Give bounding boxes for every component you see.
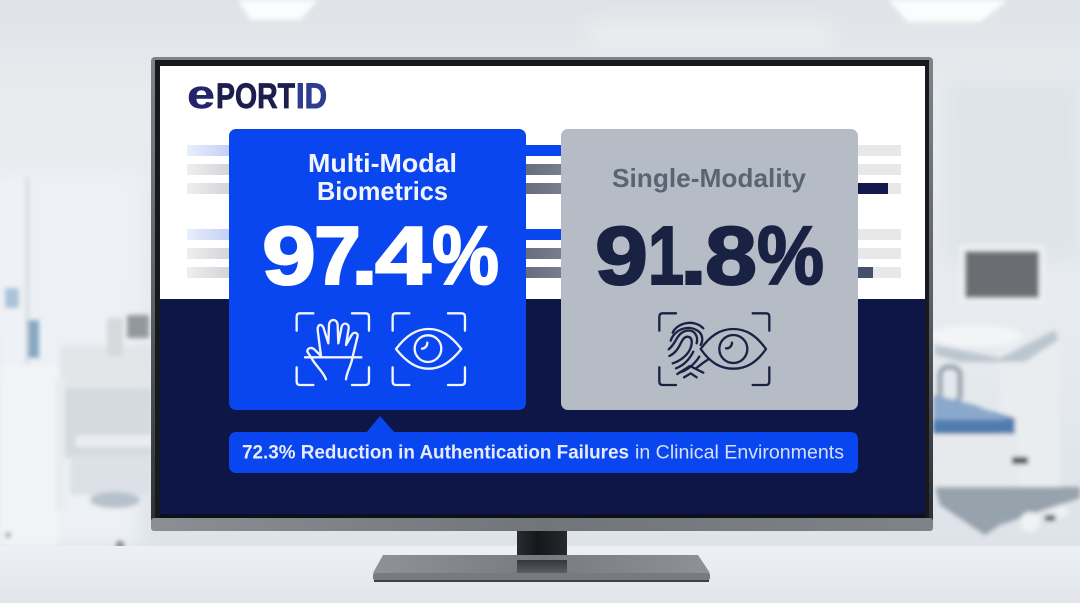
screen: white upper area <box>160 66 925 299</box>
logo: PORT <box>216 77 295 116</box>
logo: ID <box>296 77 327 116</box>
stat: 91.8%: 9 <box>595 209 648 302</box>
right ultrasound machine and bed <box>927 245 1080 535</box>
logo <box>187 73 327 117</box>
stand neck <box>517 530 567 560</box>
monitor <box>151 57 933 531</box>
heading: multi-modal biometrics: Biometrics <box>317 176 448 206</box>
stat: 91.8%: 8 <box>705 209 757 302</box>
heading: multi-modal biometrics <box>308 148 457 206</box>
desk surface <box>0 546 1080 603</box>
heading: multi-modal biometrics: Multi-Modal <box>308 148 457 178</box>
screen: navy lower area <box>160 299 925 514</box>
icon: fingerprint and eye scan <box>659 313 769 385</box>
stand base <box>373 555 710 582</box>
icon: hand scan <box>297 313 369 385</box>
stat: 97.4%: % <box>432 209 499 302</box>
stat: 91.8%: % <box>757 209 824 302</box>
stat: 97.4%: 4 <box>375 209 431 302</box>
monitor stand <box>373 530 710 582</box>
callout: reduction in authentication failures <box>229 416 858 473</box>
stat: 91.8%: 1 <box>648 209 684 302</box>
panel: single-modality <box>561 129 858 410</box>
background data bars <box>187 145 901 278</box>
ceiling lights <box>238 0 1008 22</box>
stat: 97.4%: . <box>351 209 378 302</box>
panel: multi-modal biometrics <box>229 129 526 410</box>
heading: single-modality: Single-Modality <box>612 163 807 193</box>
stat: 97.4%: 7 <box>314 209 361 302</box>
left cabinet and cart <box>0 176 152 549</box>
callout: reduction in authentication failures: in Clinical Environments <box>635 442 844 464</box>
stat: 91.8%: . <box>680 209 707 302</box>
stat: 97.4% <box>262 209 499 302</box>
logo: e <box>187 73 215 117</box>
stat: 91.8% <box>595 209 824 302</box>
stat: 97.4%: 9 <box>262 209 316 302</box>
icon: eye scan <box>393 313 465 385</box>
callout: reduction in authentication failures: 72.3% Reduction in Authentication Failures <box>242 442 629 464</box>
